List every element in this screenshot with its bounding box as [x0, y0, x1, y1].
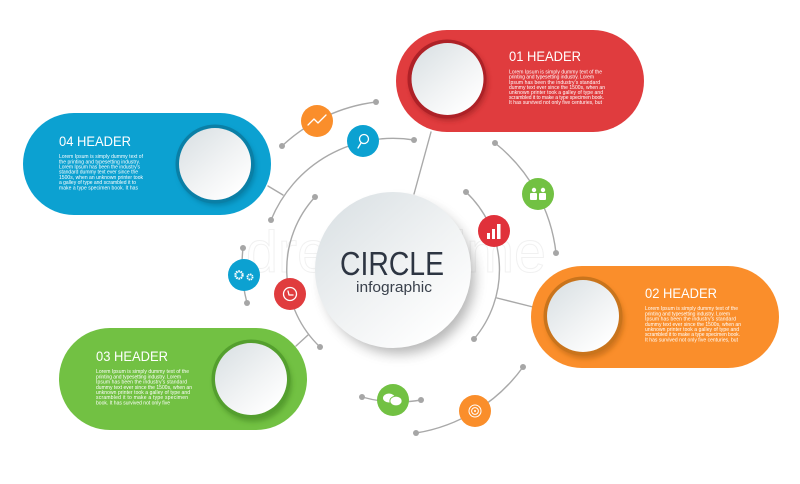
text block: 04: a galley of type and scrambled it to — [59, 180, 136, 186]
heading: 03: 03 HEADER — [96, 348, 168, 364]
text block: 03: Ipsum has been the industry's standard — [96, 380, 187, 386]
text block: 01: dummy text ever since the 1500s, when an — [509, 85, 605, 91]
node arc: chat — [359, 394, 424, 403]
text block: 04: standard dummy text ever since the — [59, 170, 138, 176]
icon: chat — [377, 384, 409, 416]
text block: 03: printing and typesetting industry. Lorem — [96, 374, 181, 380]
text block: 02 — [645, 306, 741, 343]
text block: 01: unknown printer took a galley of type and — [509, 90, 603, 96]
text block: 04: make a type specimen book. It has — [59, 185, 138, 191]
node arc: gears — [240, 245, 250, 306]
text block: 03 — [96, 369, 192, 406]
icon: gears — [228, 259, 260, 291]
node arc: chart — [463, 189, 499, 342]
text block: 02: printing and typesetting industry. Lorem — [645, 311, 730, 317]
text block: 03: scrambled it to make a type specimen — [96, 395, 188, 401]
text block: 02: Lorem Ipsum is simply dummy text of the — [645, 306, 738, 312]
icon: trend line — [301, 105, 333, 137]
central subtitle: infographic — [356, 279, 433, 296]
node arc: target — [413, 364, 526, 436]
heading: 02: 02 HEADER — [645, 285, 717, 301]
heading: 04: 04 HEADER — [59, 133, 131, 149]
text block: 02: dummy text ever since the 1500s, when an — [645, 322, 741, 328]
disc: 02 — [544, 276, 624, 359]
text block: 01: scrambled it to make a type specimen book. — [509, 95, 604, 101]
text block: 02: Ipsum has been the industry's standard — [645, 317, 736, 323]
text block: 02: It has survived not only five centuries, but — [645, 337, 739, 343]
text block: 04: 1500s, when an unknown printer took — [59, 175, 144, 181]
node arc: trend — [279, 99, 379, 149]
disc: 03 — [212, 340, 292, 422]
icon: search — [347, 125, 379, 157]
panel: 02 header — [531, 266, 779, 368]
heading: 01: 01 HEADER — [509, 48, 581, 64]
panel: 03 header — [59, 328, 307, 430]
text block: 04: the printing and typesetting industry. — [59, 159, 140, 165]
text block: 04 — [59, 154, 144, 191]
text block: 04: Lorem Ipsum is simply dummy text of — [59, 154, 144, 160]
central title: CIRCLE — [340, 245, 444, 282]
disc: 04 — [176, 124, 256, 206]
node arc: people — [492, 140, 559, 256]
node arc: search — [268, 137, 417, 223]
panel: 01 header — [396, 30, 644, 132]
text block: 01: Ipsum has been the industry's standard — [509, 80, 600, 86]
central circle — [315, 192, 475, 354]
icon: clock — [274, 278, 306, 310]
text block: 03: unknown printer took a galley of type and — [96, 390, 190, 396]
text block: 04: Lorem Ipsum has been the industry's — [59, 164, 140, 170]
text block: 03: dummy text ever since the 1500s, when an — [96, 385, 192, 391]
node arc: clock — [287, 194, 323, 350]
text block: 01: printing and typesetting industry. Lorem — [509, 75, 594, 81]
text block: 02: scrambled it to make a type specimen book. — [645, 332, 740, 338]
panel: 04 header — [23, 113, 271, 215]
text block: 02: unknown printer took a galley of type and — [645, 327, 739, 333]
icon: people — [522, 178, 554, 210]
icon: target — [459, 395, 491, 427]
text block: 03: book. It has survived not only five — [96, 400, 170, 406]
text block: 01 — [509, 69, 605, 106]
text block: 01: Lorem Ipsum is simply dummy text of the — [509, 69, 602, 75]
disc: 01 — [408, 40, 488, 121]
text block: 03: Lorem Ipsum is simply dummy text of the — [96, 369, 189, 375]
watermark: dreamstime — [246, 220, 546, 285]
connector lines — [268, 132, 533, 346]
text block: 01: It has survived not only five centuries, but — [509, 100, 603, 106]
icon: bar chart — [478, 215, 510, 247]
